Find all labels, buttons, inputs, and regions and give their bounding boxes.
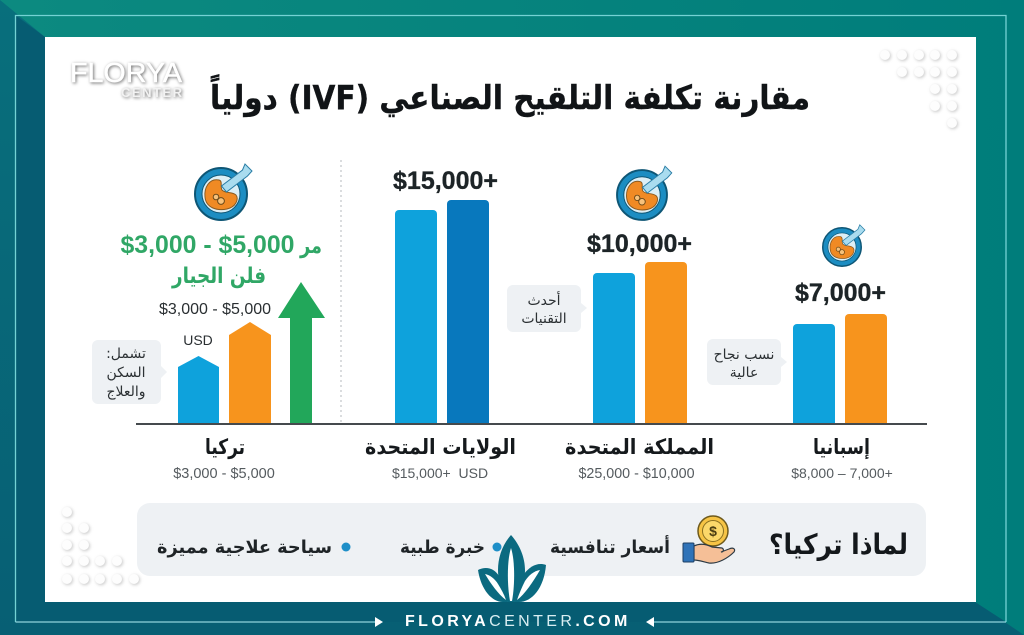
icon: arrow left of website	[375, 617, 383, 627]
callout: Turkey includes: تشمل:	[106, 346, 146, 362]
icon: arrow right of website	[646, 617, 654, 627]
headline: Turkey green name: فلن الجيار	[171, 264, 266, 289]
icon: green up arrow	[278, 282, 325, 424]
decorative dots top right	[880, 50, 957, 128]
callout: UK technologies	[507, 285, 587, 332]
label: UK: $25,000 - $10,000	[578, 466, 695, 482]
heading: why Turkey: لماذا تركيا؟	[769, 528, 908, 561]
callout: Turkey includes: والعلاج	[106, 384, 146, 400]
text: medical tourism: سياحة علاجية مميزة	[157, 537, 332, 558]
logo: plant emblem	[478, 535, 546, 602]
label: USD: USD	[183, 332, 213, 348]
icon: hand with coin: $	[709, 523, 717, 539]
label: USA: $15,000+ USD	[392, 465, 488, 481]
text: medical expertise: خبرة طبية	[400, 537, 485, 558]
logo: Florya Center: CENTER	[121, 85, 183, 100]
label: Turkey: تركيا	[205, 435, 245, 459]
chart: Spain bars	[793, 314, 887, 424]
logo: Florya Center: FLORYA	[70, 57, 182, 88]
headline: Turkey green price: $3,000 - $5,000	[120, 231, 294, 259]
divider: dashed separator	[340, 160, 342, 424]
callout: Turkey includes	[92, 340, 167, 404]
chart: USA bars	[395, 200, 489, 424]
headline: UK price: $10,000+	[587, 230, 692, 258]
label: USA: الولايات المتحدة	[365, 435, 516, 459]
label: Turkey	[173, 435, 275, 482]
callout: Spain success rates: نسب نجاح	[714, 347, 774, 363]
label: UK	[565, 435, 714, 482]
icon: hand with coin	[683, 516, 735, 563]
headline: USA price: $15,000+	[393, 167, 498, 195]
headline: Turkey green price: مر	[299, 234, 322, 259]
chart baseline	[136, 423, 927, 425]
label: USA	[365, 435, 516, 481]
label: UK: المملكة المتحدة	[565, 435, 714, 459]
text: competitive prices: أسعار تنافسية	[550, 535, 670, 558]
icon: embryo dish Spain	[823, 225, 865, 266]
callout: Spain success rates	[707, 339, 787, 385]
label: Turkey: $3,000 - $5,000	[173, 466, 275, 482]
label: Spain: $8,000 – 7,000+	[791, 465, 893, 481]
callout: UK technologies: التقنيات	[521, 311, 567, 327]
callout: Turkey includes: السكن	[106, 365, 146, 381]
website address: FLORYACENTER.COM	[405, 613, 631, 630]
chart: Turkey bars	[178, 322, 271, 424]
panel: why Turkey	[137, 503, 926, 576]
decorative dots bottom left	[62, 507, 139, 584]
label: Spain	[791, 435, 893, 481]
chart: UK bars	[593, 262, 687, 424]
headline: Spain price: $7,000+	[795, 279, 886, 307]
bullet: medical expertise	[492, 542, 502, 552]
icon: embryo dish Turkey	[195, 164, 252, 220]
callout: Spain success rates: عالية	[730, 365, 758, 381]
icon: embryo dish UK	[617, 166, 672, 220]
callout: UK technologies: أحدث	[527, 291, 561, 309]
label: Turkey range: $3,000 - $5,000	[159, 301, 271, 318]
title: مقارنة تكلفة التلقيح الصناعي (IVF) دولياً	[210, 74, 810, 118]
label: Spain: إسبانيا	[813, 435, 870, 459]
bullet: medical tourism	[342, 542, 350, 552]
